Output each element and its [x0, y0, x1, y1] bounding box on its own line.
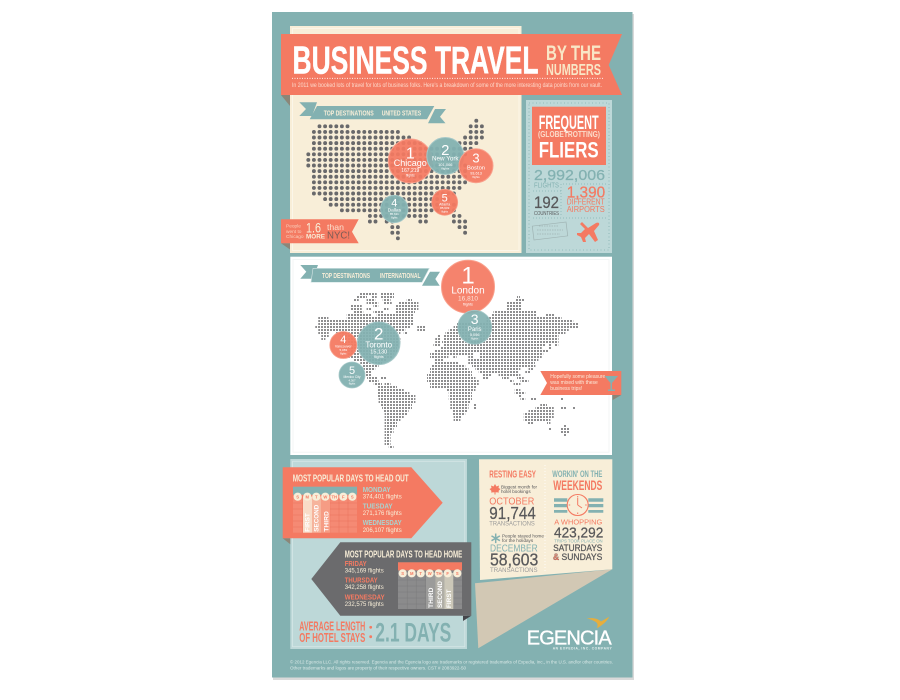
stat: airports: DIFFERENT: [567, 198, 605, 206]
resting easy column: TRANSACTIONS: [489, 522, 535, 528]
list: head out days: 271,176 flights: [363, 511, 402, 517]
circle: Atlanta: [432, 189, 458, 215]
list: head out days: 374,401 flights: [363, 494, 402, 500]
weekends column: 423,292: [554, 525, 603, 541]
list: head out days: TUESDAY: [363, 502, 393, 511]
circle: Chicago: 167,219: [401, 168, 420, 174]
weekends column: WORKIN' ON THE: [552, 469, 602, 480]
circle: Chicago: [388, 139, 432, 183]
resting easy column: [489, 470, 544, 574]
calendar: head home: W: [428, 571, 432, 576]
resting easy column: RESTING EASY: [489, 470, 536, 481]
circle: Mexico City: 5: [349, 365, 355, 377]
panel: popular days: [290, 459, 467, 649]
resting easy column: TRANSACTIONS: [490, 568, 538, 574]
US dot map: [308, 121, 482, 238]
subtitle: In 2011 we booked lots of travel for lots of business folks. Here's a breakdown of some of the more interesting data points from our vault.: [292, 82, 602, 89]
callout: Chicago vs NYC: Chicago: [286, 234, 304, 240]
calendar: head home: S: [401, 571, 404, 576]
list: head home days: 342,258 flights: [345, 585, 384, 591]
weekends column: SATURDAYS: [553, 543, 602, 553]
calendar: head home: M: [410, 571, 414, 576]
ribbon: top destinations US: TOP DESTINATIONS: [324, 108, 374, 117]
heading box: (GLOBETROTTING): [538, 130, 600, 139]
list: head out days: WEDNESDAY: [363, 518, 402, 527]
circle: Vancouver: 5,083: [340, 348, 347, 352]
resting easy column: hotel bookings: [501, 489, 531, 494]
calendar: head home: S: [456, 571, 459, 576]
callout: Chicago vs NYC: [281, 219, 359, 250]
circle: New York: New York: [432, 156, 459, 162]
callout: pleasure: [540, 371, 621, 400]
circle: Chicago: Chicago: [394, 158, 427, 168]
callout: Chicago vs NYC: went to: [286, 229, 302, 235]
logo: Egencia: AN EXPEDIA, INC. COMPANY: [553, 646, 612, 650]
weekends column: WEEKENDS: [553, 477, 602, 493]
calendar: head out: FIRST: [305, 512, 312, 532]
resting easy column: Biggest month for: [501, 484, 537, 489]
icon: martini: [604, 376, 618, 391]
circle: Paris: [458, 310, 492, 344]
calendar: head out: [293, 487, 357, 533]
panel: resting easy and weekends: [475, 459, 612, 648]
callout: pleasure: Hopefully some pleasure: [550, 374, 606, 380]
circle: Atlanta: 5: [442, 192, 448, 204]
list: head home days: WEDNESDAY: [345, 592, 385, 601]
circle: New York: [427, 138, 464, 174]
circle: New York: flights: [441, 166, 450, 170]
list: head home days: 345,169 flights: [345, 568, 384, 574]
callout: pleasure: was mixed with these: [550, 380, 598, 386]
list: head home days: [345, 559, 385, 608]
circle: Vancouver: 4: [340, 334, 346, 346]
calendar: head home: F: [446, 571, 449, 576]
circle: London: [442, 260, 494, 313]
circle: Chicago: flights: [406, 173, 415, 177]
calendar: head out: M: [306, 494, 310, 499]
circle: Dallas: 4: [391, 198, 397, 210]
resting easy column: OCTOBER: [489, 497, 534, 508]
calendar: head out: T: [315, 494, 318, 499]
circle: Vancouver: flights: [340, 352, 347, 355]
circle: Mexico City: flights: [349, 382, 356, 385]
arrow: head home: [311, 542, 471, 621]
circle: Vancouver: [330, 332, 357, 358]
circle: Atlanta: 85,649: [440, 206, 450, 210]
heading box: [532, 107, 606, 165]
ribbon: top destinations international: TOP DESTINATIONS: [322, 271, 370, 280]
calendar: head out: TH: [332, 494, 337, 499]
calendar: head out: THIRD: [323, 511, 330, 532]
calendar: head home: TH: [436, 571, 441, 576]
calendar: head out: SECOND: [314, 505, 321, 532]
callout: Chicago vs NYC: People: [286, 224, 301, 230]
calendar: head out: F: [342, 494, 345, 499]
poster background: [272, 12, 634, 680]
circle: Atlanta: Atlanta: [439, 202, 450, 206]
calendar: head out: S: [296, 494, 299, 499]
circle: Mexico City: [339, 362, 365, 388]
stat: hotel stays: [299, 618, 451, 648]
circle: London: flights: [463, 302, 473, 306]
circle: Toronto: flights: [374, 355, 384, 359]
calendar: head home: FIRST: [446, 589, 453, 608]
weekends column: [552, 469, 603, 562]
stat: flights: FLIGHTS: [534, 183, 559, 190]
logo: Egencia: [527, 617, 612, 650]
calendar: head home: T: [419, 571, 422, 576]
panel: international map: [290, 257, 612, 455]
calendar: head out: S: [351, 494, 354, 499]
circle: Vancouver: Vancouver: [335, 344, 353, 348]
title: business travel: BUSINESS TRAVEL: [292, 39, 538, 82]
circle: Boston: 93,613: [470, 171, 482, 175]
callout: pleasure: business trips!: [550, 386, 582, 392]
circle: New York: 2: [441, 142, 449, 159]
icon: maple leaf: [490, 484, 500, 494]
stat: flights: 2,992,006: [534, 168, 605, 184]
circle: Dallas: flights: [391, 216, 398, 219]
banner title: [281, 34, 622, 106]
resting easy column: for the holidays: [502, 538, 534, 543]
circle: Mexico City: 4,367: [348, 378, 356, 382]
circle: Dallas: 85,611: [390, 212, 399, 216]
calendar: head home: THIRD: [428, 587, 435, 608]
arrow: head home: MOST POPULAR DAYS TO HEAD HOME: [345, 549, 462, 561]
resting easy column: People stayed home: [502, 533, 544, 538]
calendar: head out: W: [323, 494, 327, 499]
circle: Boston: [459, 149, 493, 183]
footer legal text: [290, 658, 613, 670]
ribbon: top destinations US: UNITED STATES: [382, 108, 421, 117]
icon: snowflake: [492, 534, 500, 543]
callout: Chicago vs NYC: NYC!: [327, 231, 350, 242]
heading box: FLIERS: [539, 138, 599, 162]
ribbon: top destinations international: INTERNATIONAL: [380, 271, 421, 280]
footer legal text: Other trademarks and logos are property of their respective owners. CST # 2083922-50: [290, 666, 466, 670]
circle: Boston: 3: [472, 150, 480, 165]
arrow: head out: MOST POPULAR DAYS TO HEAD OUT: [293, 472, 409, 484]
stat: airports: AIRPORTS: [567, 205, 605, 214]
circle: Paris: 3: [471, 311, 479, 327]
logo: Egencia: EGENCIA: [527, 627, 612, 649]
footer legal text: © 2012 Egencia LLC. All rights reserved. Egencia and the Egencia logo are trademarks or registered trademarks of Expedia, Inc., in the U.S. and/or other countries.: [290, 658, 613, 664]
circle: Boston: Boston: [467, 165, 485, 171]
circle: Toronto: 2: [374, 324, 383, 343]
circle: Paris: Paris: [468, 327, 482, 333]
arrow: head out: [283, 467, 443, 544]
stat: airports: [567, 185, 605, 214]
circle: London: London: [451, 285, 485, 296]
weekends column: A WHOPPING: [554, 517, 603, 526]
circle: Atlanta: flights: [441, 210, 449, 213]
callout: Chicago vs NYC: 1.6: [306, 220, 321, 236]
ribbon: top destinations international: [300, 265, 440, 286]
circle: Boston: flights: [472, 175, 480, 179]
title: by the: BY THE: [546, 42, 601, 65]
heading box: FREQUENT: [539, 113, 599, 134]
resting easy column: 91,744: [489, 503, 536, 523]
stat: flights: [534, 168, 605, 190]
circle: Dallas: Dallas: [388, 208, 402, 214]
list: head home days: THURSDAY: [345, 576, 378, 585]
stat: hotel stays: AVERAGE LENGTH: [299, 619, 365, 634]
resting easy column: DECEMBER: [490, 543, 538, 554]
stat: airports: 1,390: [567, 185, 605, 202]
circle: Toronto: Toronto: [365, 340, 393, 349]
weekends column: & SUNDAYS: [553, 552, 602, 562]
panel: US destinations: [290, 26, 522, 253]
callout: Chicago vs NYC: than: [327, 222, 344, 232]
world dot map: [315, 294, 579, 447]
list: head out days: [363, 485, 402, 534]
circle: Toronto: [357, 322, 400, 365]
list: head home days: 232,575 flights: [345, 602, 384, 608]
circle: Mexico City: Mexico City: [343, 375, 361, 379]
list: head out days: 206,107 flights: [363, 528, 402, 534]
callout: Chicago vs NYC: MORE: [306, 233, 326, 240]
calendar: head home: SECOND: [437, 581, 444, 608]
stat: countries: 192: [534, 193, 559, 212]
circle: Dallas: [381, 195, 408, 223]
icon: clock: [567, 494, 588, 516]
ribbon: top destinations US: [299, 102, 446, 123]
circle: Paris: flights: [471, 336, 479, 340]
circle: London: 1: [461, 262, 475, 289]
circle: Chicago: 1: [406, 145, 415, 162]
list: head out days: MONDAY: [363, 485, 391, 494]
circle: New York: 101,066: [438, 162, 453, 167]
resting easy column: 58,603: [490, 550, 538, 570]
circle: Paris: 5,056: [470, 333, 479, 337]
stat: hotel stays: 2.1 DAYS: [375, 618, 451, 648]
calendar: head home: [398, 562, 462, 609]
list: head home days: FRIDAY: [345, 559, 367, 568]
circle: Toronto: 15,130: [370, 349, 387, 355]
circle: London: 16,810: [458, 296, 478, 303]
stamps: [532, 222, 568, 240]
panel: frequent fliers: [526, 100, 612, 253]
icon: plane: [577, 222, 599, 242]
stat: hotel stays: OF HOTEL STAYS: [299, 630, 365, 645]
title: numbers: NUMBERS: [546, 62, 601, 79]
weekends column: TRIPS TOOK PLACE ON: [554, 538, 603, 544]
stat: countries: COUNTRIES: [534, 211, 559, 217]
